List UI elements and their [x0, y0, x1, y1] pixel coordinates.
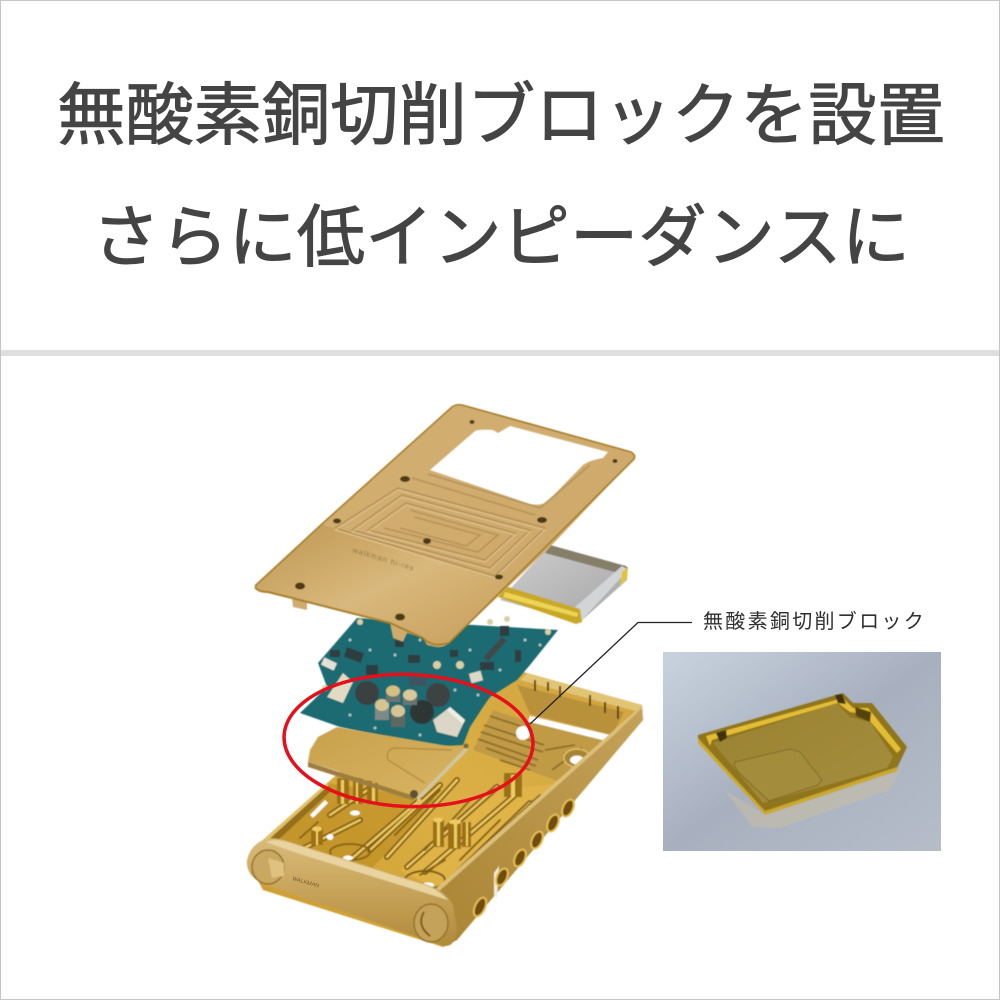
oxygen-free copper block	[308, 727, 468, 802]
top plate: walkman hi-res	[350, 545, 416, 573]
heading line 1: 無酸素銅切削ブロックを設置	[57, 78, 945, 154]
lower sloped part of plate	[255, 525, 510, 647]
chassis	[247, 657, 643, 947]
left inner wall	[263, 783, 332, 843]
board components	[330, 626, 521, 675]
top plate	[255, 405, 635, 647]
leader line	[530, 622, 692, 724]
screw holes	[295, 420, 618, 620]
inset photo: copper block	[663, 652, 941, 851]
floor shading	[263, 783, 440, 880]
side edge	[433, 705, 643, 947]
upper inner wall	[517, 685, 624, 735]
white slot in chassis	[528, 716, 610, 741]
callout label: 無酸素銅切削ブロック	[703, 609, 926, 633]
ribbed area	[473, 710, 606, 783]
battery	[498, 545, 628, 624]
main board	[300, 616, 558, 747]
end cap	[247, 838, 457, 946]
floor channels	[300, 780, 540, 889]
plate grooves	[335, 465, 590, 576]
holes in floor	[310, 800, 434, 888]
device text engraved on end cap: WALKMAN	[291, 876, 320, 890]
side ports	[471, 798, 576, 918]
red highlight ellipse	[282, 670, 535, 811]
heading line 2: さらに低インピーダンスに	[92, 200, 910, 276]
standoffs	[311, 773, 522, 849]
capacitors and inductors	[327, 673, 465, 737]
